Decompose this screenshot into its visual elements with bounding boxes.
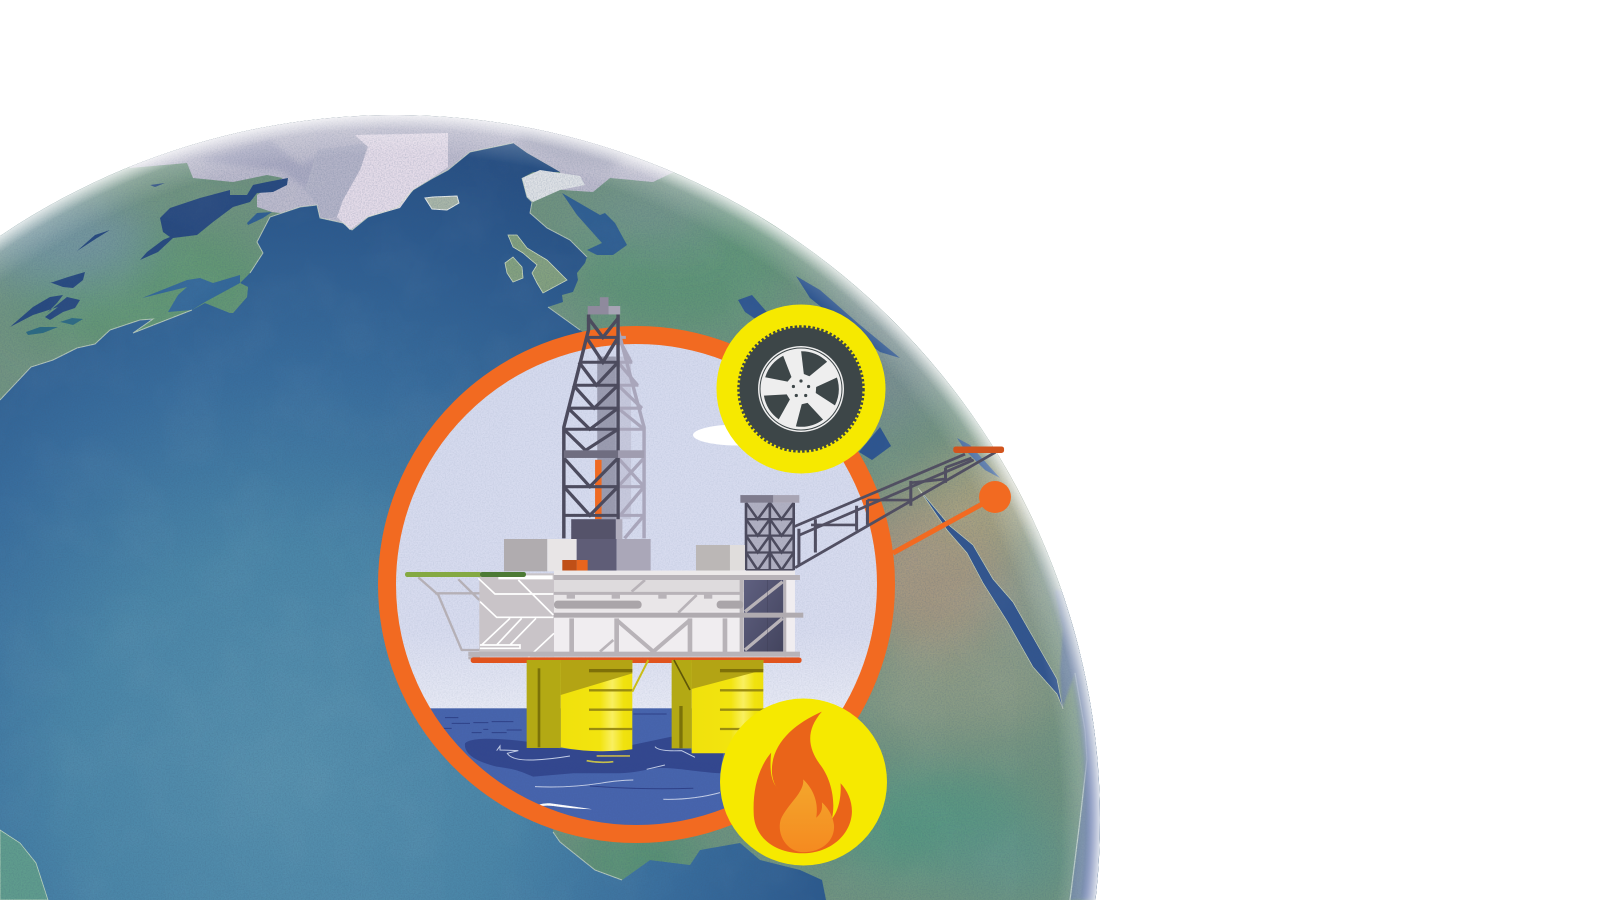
left yellow pontoon [527,660,648,751]
Hudson Bay [140,178,288,260]
Baltic Sea [562,193,627,255]
orange ring [387,335,886,834]
cloud [693,424,783,446]
sea [383,343,879,842]
right yellow pontoon [672,660,763,753]
globe [0,115,1100,900]
equipment blocks on deck [504,539,745,571]
scene grain [395,343,879,827]
inner flame [780,779,834,852]
map pin dot [979,481,1011,513]
flame [754,712,852,853]
tyre [740,328,862,450]
helideck [405,572,526,577]
globe rim shading [1054,597,1100,900]
deck structure [468,571,803,663]
crane pad [953,446,1004,453]
icon: flame badge [720,698,887,866]
land masses: North America, Greenland, Eurasia and Africa [0,115,1100,900]
derrick tower [564,297,644,538]
coastline highlight [0,143,622,880]
ocean [0,115,1100,900]
deck frames [554,580,785,657]
Arctic ice and islands [130,115,674,230]
Greenland [337,133,448,230]
offshore oil rig [405,297,1004,753]
pointer line to map pin [893,497,995,553]
panel: oil platform scene in orange ring [383,335,1011,842]
wheel rim [758,346,844,432]
Ungava Bay [247,212,272,225]
Scandinavian ice cap [522,170,585,202]
globe rim glow [0,115,1100,900]
white wave crest [533,803,592,809]
crane boom [794,452,995,568]
sky [396,344,878,826]
mottled watercolour texture [0,100,1110,900]
Horn of Africa coast line [1070,673,1087,900]
wing white bracing [478,577,554,657]
Great Lakes and inland waters [10,183,165,335]
crane tower [740,495,799,570]
water ripples [497,746,720,799]
Ellesmere grey ice region [305,143,368,218]
Gulf of St Lawrence [142,275,240,312]
illustration: globe with offshore oil rig [0,115,1100,900]
dark water patch [465,737,723,777]
Britain and Ireland [505,235,567,293]
Red Sea [918,488,1063,709]
South America [0,830,48,900]
paper grain [0,100,1110,900]
icon: car tyre badge [716,304,886,474]
Indian Ocean [1060,590,1100,900]
Iceland [425,196,459,210]
helideck truss [418,577,480,658]
Mediterranean and other seas [738,276,1000,478]
